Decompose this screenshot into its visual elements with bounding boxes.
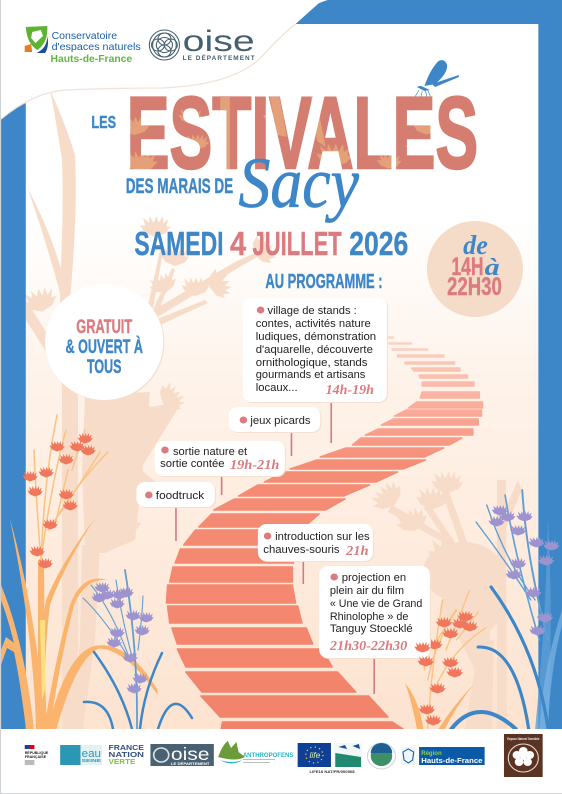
logo: Conservatoire d'espaces naturels: Hauts-de-France: [51, 53, 132, 65]
background plant silhouettes: [21, 90, 522, 729]
date line: SAMEDI: [134, 226, 224, 263]
logo: Conservatoire d'espaces naturels: d'espaces naturels: [52, 41, 141, 53]
logo: Espace Naturel Sensible: [504, 734, 543, 777]
logo: République française: FRANÇAISE: [25, 755, 47, 759]
card: village de stands: 14h-19h: [326, 382, 374, 398]
flowers overlapping the last card: [414, 642, 434, 666]
badge: gratuit: [45, 284, 164, 401]
card: village de stands: [243, 298, 388, 403]
badge: hours: à: [485, 255, 500, 281]
badge: hours: [427, 221, 523, 317]
logo: Oise le département: [149, 24, 255, 62]
card: projection: projection en: [342, 571, 406, 584]
card: village de stands: d'aquarelle, découverte: [256, 343, 373, 356]
card: sortie nature: sortie contée: [160, 457, 225, 470]
date line: [134, 226, 408, 263]
badge: hours: 14H: [451, 254, 484, 281]
card: projection: [319, 566, 431, 659]
card: village de stands: village de stands :: [268, 304, 357, 317]
card: village de stands: gourmands et artisans: [256, 368, 366, 381]
card: village de stands: ludiques, démonstration: [256, 330, 376, 343]
white header curve: [0, 0, 322, 119]
logo: agence de l'eau: eau: [82, 748, 101, 760]
card: projection: Tanguy Stoecklé: [330, 622, 413, 635]
logo: République française: [25, 745, 49, 765]
card: chauves-souris: 21h: [345, 543, 369, 559]
logo: Espace Naturel Sensible: Espace Naturel Sensible: [507, 737, 540, 741]
logo: Oise le département: oise: [183, 24, 255, 58]
logo: agence de l'eau: SEINE: [82, 758, 102, 764]
logo: agence de l'eau: [60, 745, 102, 765]
card: projection: 21h30-22h30: [329, 638, 407, 654]
right foreground plants: [405, 490, 562, 729]
logo: France Nation Verte: NATION: [109, 750, 144, 759]
card: sortie nature: sortie nature et: [173, 445, 248, 458]
logo: Natura 2000: [334, 743, 362, 767]
badge: gratuit: & OUVERT À: [66, 336, 143, 358]
logo: Europe Life: life: [309, 750, 321, 760]
heading: des marais de: DES MARAIS DE: [126, 174, 233, 198]
heading: au programme: AU PROGRAMME :: [265, 271, 383, 293]
connectors: [175, 402, 375, 694]
card: jeux picards: [229, 407, 321, 433]
card: village de stands: contes, activités nature: [256, 317, 371, 330]
logo: Oise dark: LE DÉPARTEMENT: [171, 761, 210, 766]
date line: JUILLET: [253, 226, 342, 263]
logo: Conservatoire d'espaces naturels: Conservatoire: [52, 30, 117, 42]
card: sortie nature: [155, 441, 286, 477]
badge: gratuit: TOUS: [87, 357, 121, 378]
card: sortie nature: 19h-21h: [230, 457, 279, 473]
logo: Région Hauts-de-France: Hauts-de-France: [421, 756, 482, 765]
card: village de stands: locaux...: [256, 381, 298, 394]
path of steps: [167, 337, 482, 729]
date line: 4: [230, 226, 246, 263]
logo: Life Anthropofens: [218, 741, 294, 764]
card: jeux picards: jeux picards: [249, 414, 311, 427]
card: projection: Rhinolophe » de: [330, 610, 408, 623]
bottom white band: [0, 729, 562, 794]
logo: France Nation Verte: [109, 743, 144, 766]
logo: République française: RÉPUBLIQUE: [25, 750, 49, 755]
logo: circular seal: [368, 743, 395, 769]
date line: 2026: [349, 226, 408, 263]
card: chauves-souris: [258, 524, 374, 562]
logo: Oise le département: LE DÉPARTEMENT: [183, 54, 255, 62]
logo: Europe Life: [298, 743, 355, 774]
badge: gratuit: GRATUIT: [76, 317, 132, 338]
icon: dragonfly: [414, 60, 459, 100]
badge: hours: de: [463, 231, 488, 261]
left foreground plants: [1, 415, 192, 729]
logo: Europe Life: LIFE16 NAT/FR/000508: [309, 769, 355, 774]
logo: Oise dark: oise: [171, 744, 210, 764]
heading: Les: LES: [91, 112, 116, 132]
card: foodtruck: [136, 482, 216, 508]
logo: France Nation Verte: FRANCE: [109, 743, 144, 752]
logo: Région Hauts-de-France: [401, 747, 485, 765]
card: foodtruck: foodtruck: [156, 489, 204, 502]
logo: Oise dark: [150, 744, 214, 766]
logo: Conservatoire d'espaces naturels: [25, 26, 141, 65]
logo: Life Anthropofens: ANTHROPOFENS: [243, 752, 294, 759]
logo: France Nation Verte: VERTE: [109, 757, 135, 766]
card: projection: « Une vie de Grand: [330, 597, 422, 610]
badge: hours: 22H30: [447, 274, 502, 301]
partner logos: [25, 734, 543, 777]
card: projection: plein air du film: [330, 584, 404, 597]
card: chauves-souris: chauves-souris: [263, 543, 340, 556]
card: village de stands: ornithologique, stands: [256, 356, 368, 369]
script title: Sacy: Sacy: [239, 143, 360, 223]
logo: Région Hauts-de-France: Région: [421, 750, 442, 757]
card: chauves-souris: introduction sur les: [275, 530, 370, 543]
